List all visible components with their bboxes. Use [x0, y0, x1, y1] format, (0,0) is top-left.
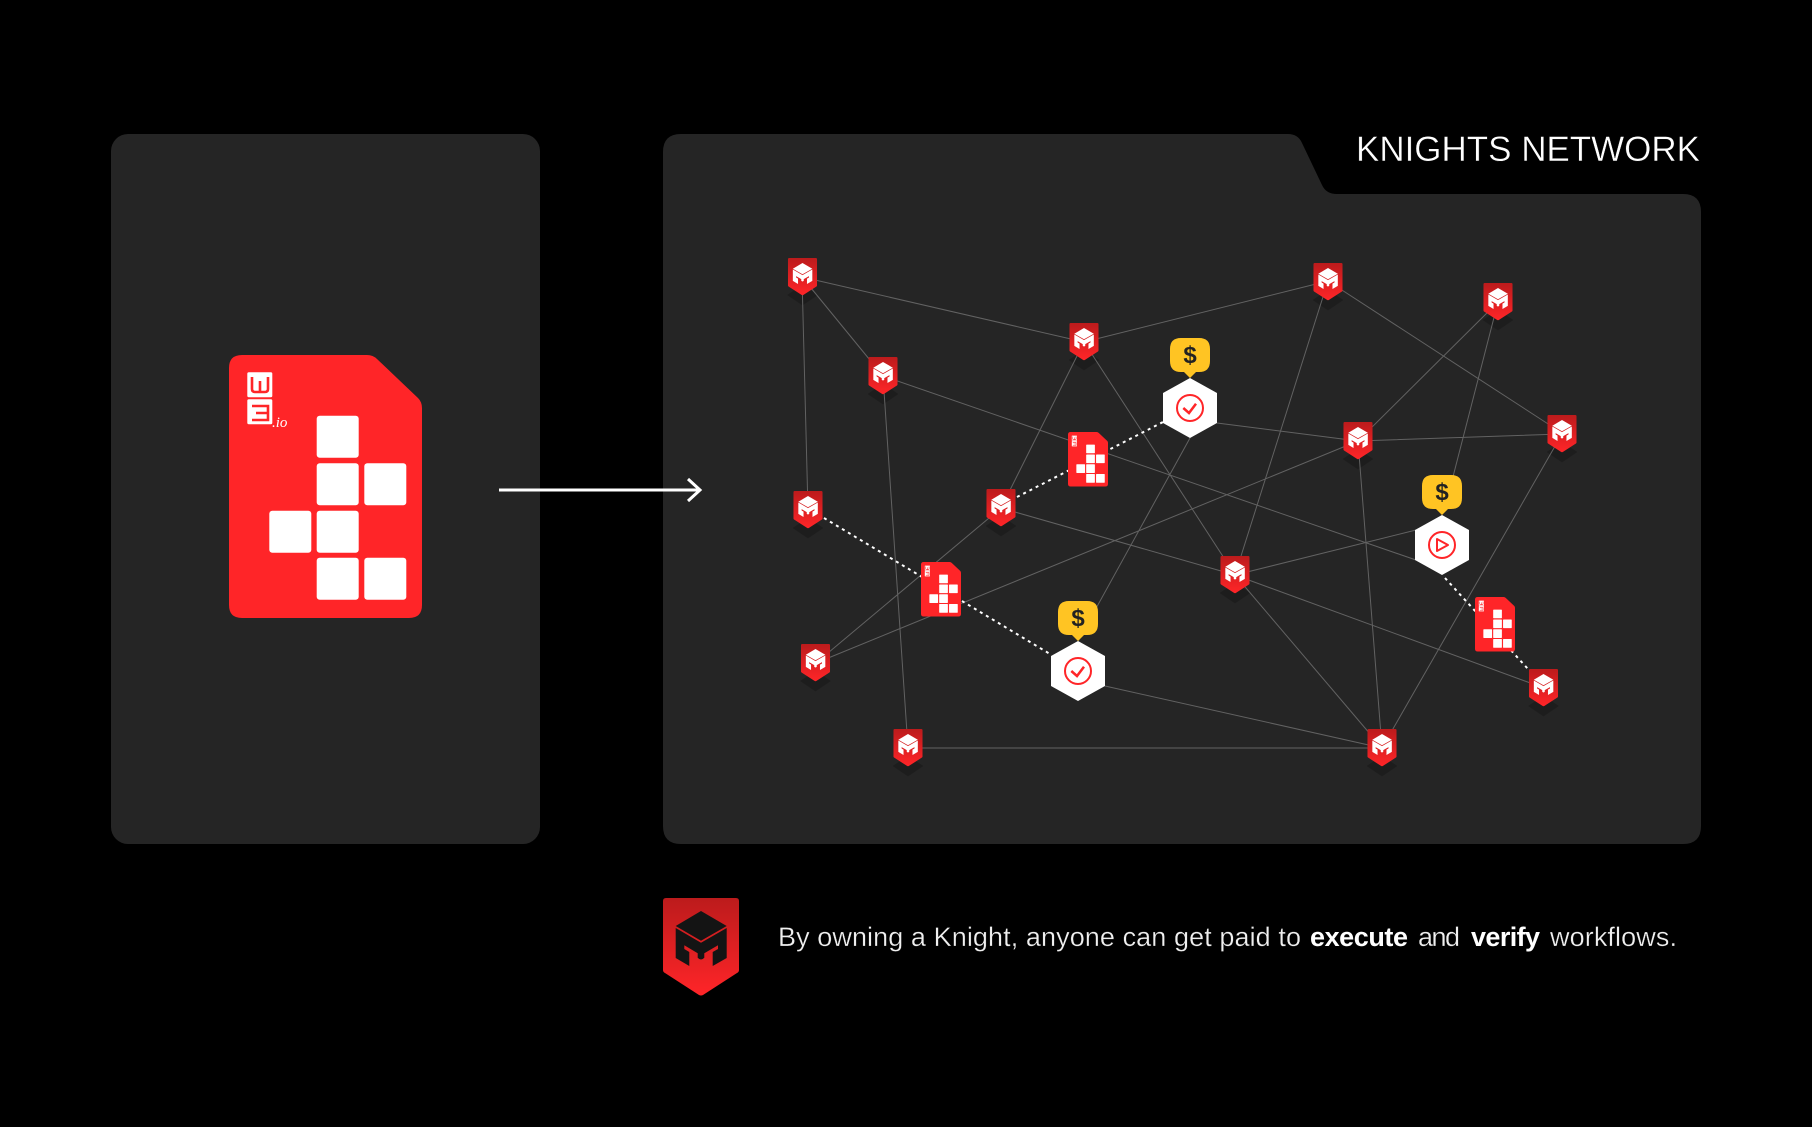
title: Knights Network: KNIGHTS NETWORK: [1356, 130, 1700, 169]
knight node 6: [1343, 422, 1373, 459]
panel: SIM card panel: [111, 134, 540, 844]
knight node 4: [1313, 263, 1343, 300]
knight node 2: [868, 357, 898, 394]
caption text: By owning a Knight, anyone can get paid to: [778, 922, 1301, 952]
mini SIM 2: [921, 562, 961, 617]
execute hexagon with play icon and dollar badge: $: [1435, 479, 1449, 506]
verify hexagon 2 with dollar badge: $: [1071, 605, 1085, 632]
knight node 9: [986, 489, 1016, 526]
knight node 10: [1220, 556, 1250, 593]
knight node 12: [1529, 669, 1558, 706]
execute hexagon with play icon and dollar badge: [1415, 475, 1469, 575]
knight node 5: [1483, 283, 1513, 320]
knight node 11: [801, 644, 830, 681]
caption text: workflows.: [1549, 922, 1677, 952]
knight node 8: [793, 491, 823, 528]
icon: large knight shield: [663, 898, 739, 996]
arrow: SIM to network: [499, 479, 700, 501]
verify hexagon 1 with dollar badge: $: [1183, 342, 1197, 369]
knight node 14: [1367, 729, 1397, 766]
knight node 1: [788, 258, 817, 295]
dotted execution links: [824, 422, 1528, 669]
node ground shadows: [787, 285, 1577, 776]
panel: Knights Network folder panel: [663, 134, 1701, 844]
caption text: execute: [1310, 922, 1408, 952]
icon: large red SIM card with W3 logo: .io: [272, 415, 288, 431]
caption text: and: [1418, 922, 1460, 952]
icon: large red SIM card with W3 logo: [229, 355, 422, 618]
verify hexagon 1 with dollar badge: [1163, 338, 1217, 438]
network connection lines: [802, 277, 1562, 748]
mini SIM 1: [1068, 432, 1108, 487]
knight node 3: [1069, 323, 1099, 360]
knight node 13: [893, 729, 923, 766]
knight node 7: [1547, 415, 1577, 452]
verify hexagon 2 with dollar badge: [1051, 601, 1105, 701]
caption text: verify: [1471, 922, 1540, 952]
mini SIM 3: [1475, 597, 1515, 652]
caption text: [778, 922, 1677, 952]
